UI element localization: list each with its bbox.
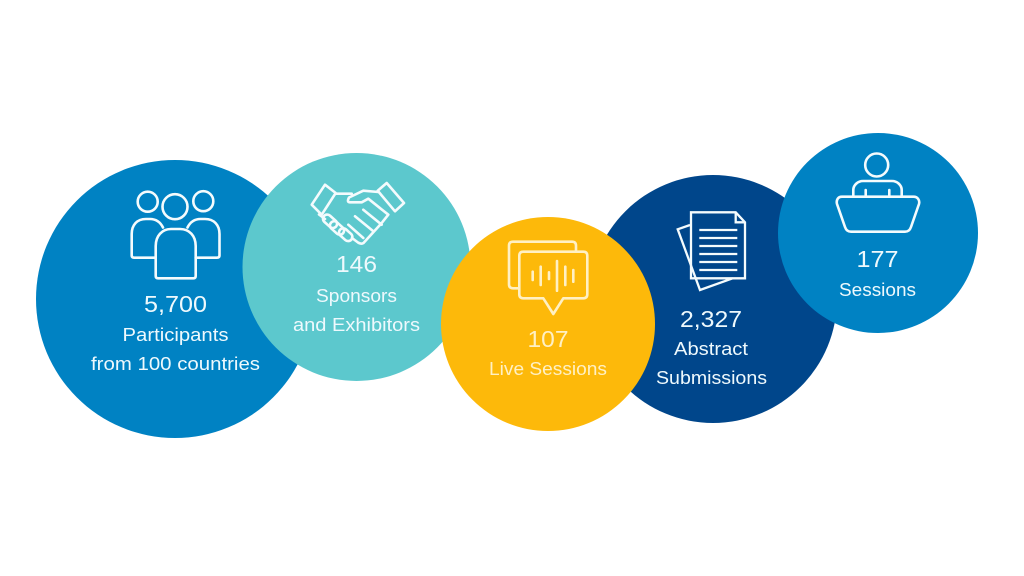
- icon: people: [132, 191, 220, 278]
- label: sponsors: Sponsors: [316, 286, 397, 306]
- stat: 2,327: 2,327: [680, 306, 742, 332]
- icon: handshake: [312, 183, 404, 244]
- label: abstract: Abstract: [674, 339, 748, 359]
- panel: abstract submissions: [589, 175, 837, 423]
- icon: speech bubbles with sound wave: [509, 242, 587, 314]
- stat: 177: 177: [856, 246, 898, 272]
- panel: live sessions: [441, 217, 655, 431]
- icon: presenter at desk: [837, 154, 919, 232]
- stat: 146: 146: [336, 251, 377, 277]
- label: live sessions: Live Sessions: [489, 359, 607, 379]
- panel: sessions: [778, 133, 978, 333]
- label: participants: Participants: [122, 325, 228, 345]
- label: and exhibitors: and Exhibitors: [293, 315, 420, 335]
- label: submissions: Submissions: [656, 368, 767, 388]
- stat: 107: 107: [528, 326, 568, 352]
- icon: documents: [678, 212, 745, 290]
- label: from 100 countries: from 100 countries: [91, 354, 260, 374]
- panel: participants: [36, 160, 314, 438]
- label: sessions: Sessions: [839, 280, 916, 300]
- panel: sponsors: [242, 153, 470, 381]
- stat: 5,700: 5,700: [144, 291, 207, 317]
